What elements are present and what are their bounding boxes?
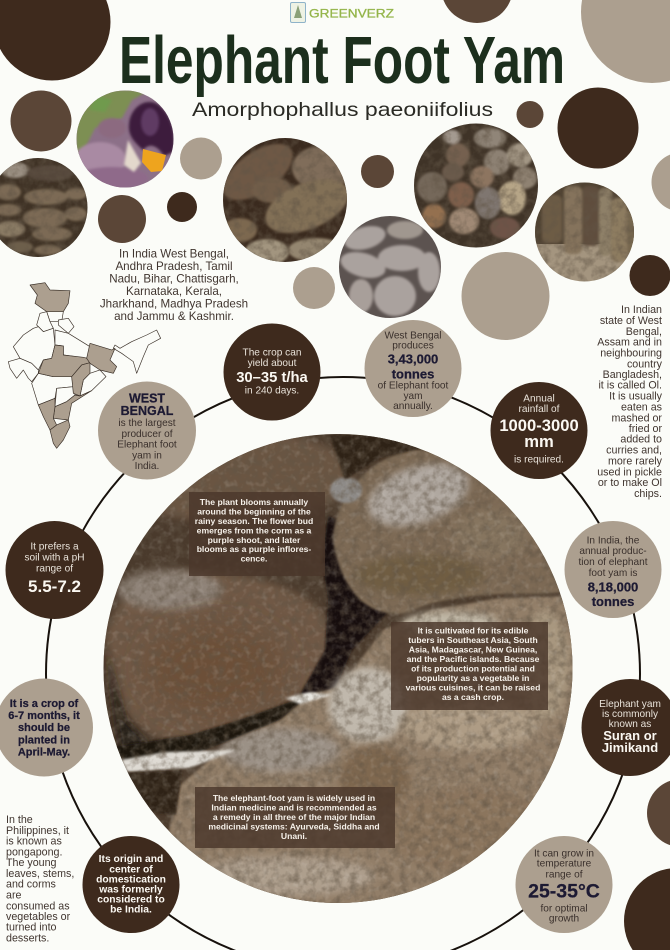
text: Ol in West Bengal and Bangladesh: more rarely bbox=[608, 455, 663, 467]
node: largest producer: producer of bbox=[121, 429, 173, 440]
node: largest producer: is the largest bbox=[118, 418, 176, 429]
node: temperature bbox=[516, 836, 612, 933]
node: common names: Suran or bbox=[603, 728, 657, 743]
panel: medicine: The elephant-foot yam is widely used in bbox=[213, 793, 375, 803]
panel: medicine bbox=[195, 787, 395, 848]
node: common names: Jimikand bbox=[602, 740, 658, 755]
panel: medicine: Indian medicine and is recommended as bbox=[211, 802, 377, 812]
map of India bbox=[8, 283, 161, 448]
node: temperature: It can grow in bbox=[534, 848, 594, 859]
node: crop duration: 6-7 months, it bbox=[8, 710, 80, 722]
node: soil pH: 5.5-7.2 bbox=[28, 577, 81, 596]
panel: cultivation bbox=[391, 622, 548, 710]
node: soil pH: range of bbox=[36, 563, 73, 574]
node: largest producer: India. bbox=[135, 461, 159, 472]
node: common names: is commonly bbox=[602, 709, 659, 720]
panel: blooming: cence. bbox=[241, 554, 267, 564]
node: origin: domestication bbox=[96, 874, 166, 885]
node: origin: Its origin and bbox=[99, 854, 163, 865]
main photo: elephant foot yams bbox=[95, 429, 580, 910]
panel: blooming: around the beginning of the bbox=[197, 506, 311, 516]
panel: cultivation: Asia, Madagascar, New Guinea, bbox=[409, 644, 537, 654]
node: crop duration: It is a crop of bbox=[10, 698, 79, 710]
node: temperature: 25-35°C bbox=[528, 880, 600, 902]
node: crop duration: April-May. bbox=[18, 746, 70, 758]
node: rainfall: is required. bbox=[514, 454, 564, 466]
text: Ol in West Bengal and Bangladesh: eaten as bbox=[621, 402, 662, 414]
text: Philippines: pongapong. bbox=[6, 846, 62, 858]
node: crop yield: yield about bbox=[248, 358, 297, 369]
node: annual production: 8,18,000 bbox=[588, 579, 638, 594]
photo: yam tubers bbox=[223, 138, 347, 262]
text: growing states: Karnataka, Kerala, bbox=[126, 285, 222, 298]
node: West Bengal production: tonnes bbox=[392, 366, 434, 382]
panel: blooming: The plant blooms annually bbox=[200, 497, 308, 507]
text: Philippines: The young bbox=[6, 857, 57, 869]
text: Philippines bbox=[6, 814, 74, 945]
text: Ol in West Bengal and Bangladesh: fried or bbox=[629, 423, 662, 435]
text: Ol in West Bengal and Bangladesh bbox=[597, 304, 663, 500]
logo: Greenverz: GREENVERZ bbox=[309, 6, 394, 20]
node: largest producer: WEST bbox=[129, 392, 165, 406]
node: West Bengal production: produces bbox=[392, 340, 434, 352]
text: growing states: In India West Bengal, bbox=[119, 248, 229, 260]
node: origin bbox=[82, 836, 180, 933]
node: origin: be India. bbox=[110, 905, 152, 916]
node: temperature: range of bbox=[545, 869, 583, 880]
text: growing states: Nadu, Bihar, Chattisgarh, bbox=[109, 272, 239, 286]
photo: stacked yams bbox=[0, 158, 88, 258]
text: Ol in West Bengal and Bangladesh: It is usually bbox=[609, 391, 663, 403]
photo: gray yams bbox=[338, 216, 441, 318]
text: Ol in West Bengal and Bangladesh: country bbox=[627, 358, 663, 370]
panel: medicine: Unani. bbox=[281, 831, 307, 841]
node: annual production: In India, the bbox=[587, 536, 640, 546]
text: Ol in West Bengal and Bangladesh: used in pickle bbox=[597, 466, 662, 478]
node: annual production: annual produc- bbox=[579, 546, 647, 557]
node: temperature: temperature bbox=[537, 859, 592, 870]
node: origin: center of bbox=[109, 864, 153, 875]
node: crop duration: planted in bbox=[18, 734, 70, 746]
panel: cultivation: of its production potential and bbox=[411, 664, 535, 674]
text: Ol in West Bengal and Bangladesh: it is called Ol. bbox=[598, 380, 662, 392]
node: common names: known as bbox=[609, 719, 651, 730]
panel: blooming bbox=[189, 492, 325, 576]
text: Ol in West Bengal and Bangladesh: state of West bbox=[600, 315, 662, 327]
logo: Greenverz bbox=[290, 2, 394, 22]
text: Philippines: vegetables or bbox=[6, 911, 71, 923]
node: rainfall: 1000-3000 bbox=[499, 416, 579, 435]
text: Philippines: leaves, stems, bbox=[6, 868, 74, 880]
panel: medicine: a remedy in all three of the major Indian bbox=[213, 812, 375, 822]
panel: cultivation: popularity as a vegetable in bbox=[417, 673, 529, 683]
text: Ol in West Bengal and Bangladesh: In Indian bbox=[621, 304, 662, 316]
node: West Bengal production: 3,43,000 bbox=[388, 352, 438, 366]
node: annual production: tion of elephant bbox=[578, 557, 648, 568]
node: crop duration: should be bbox=[18, 722, 70, 734]
node: soil pH bbox=[6, 521, 104, 619]
text: Ol in West Bengal and Bangladesh: chips. bbox=[634, 488, 662, 500]
photo: flower bbox=[74, 90, 174, 189]
node: soil pH: It prefers a bbox=[30, 542, 79, 553]
node: origin: was formerly bbox=[98, 884, 163, 895]
node: crop yield: The crop can bbox=[243, 348, 301, 358]
panel: cultivation: It is cultivated for its edible bbox=[418, 626, 529, 636]
text: Ol in West Bengal and Bangladesh: Bangladesh, bbox=[603, 369, 662, 381]
node: largest producer: BENGAL bbox=[121, 404, 174, 418]
node: West Bengal production: of Elephant foot bbox=[378, 380, 449, 392]
text: Ol in West Bengal and Bangladesh: mashed or bbox=[612, 412, 662, 424]
text: Ol in West Bengal and Bangladesh: curries and, bbox=[606, 445, 662, 457]
node: annual production: tonnes bbox=[592, 594, 634, 609]
text: Philippines: Philippines, it bbox=[6, 825, 69, 837]
node: West Bengal production: West Bengal bbox=[384, 330, 442, 342]
node: crop duration bbox=[0, 678, 93, 776]
node: largest producer: Elephant foot bbox=[117, 440, 177, 450]
text: growing states: Andhra Pradesh, Tamil bbox=[115, 260, 233, 273]
panel: medicine: medicinal systems: Ayurveda, Siddha and bbox=[208, 822, 380, 832]
node: common names bbox=[582, 679, 670, 776]
text: Philippines: desserts. bbox=[6, 933, 49, 945]
text: Ol in West Bengal and Bangladesh: Bengal, bbox=[626, 326, 662, 338]
panel: cultivation: as a cash crop. bbox=[442, 692, 504, 702]
node: largest producer: yam in bbox=[132, 450, 162, 462]
node: West Bengal production bbox=[364, 320, 462, 417]
photo: taro corms bbox=[414, 123, 538, 248]
node: rainfall: Annual bbox=[523, 394, 555, 404]
text: growing states: Jharkhand, Madhya Pradesh bbox=[100, 298, 248, 310]
panel: blooming: blooms as a purple inflores- bbox=[197, 544, 311, 554]
node: rainfall bbox=[490, 382, 588, 479]
text: Ol in West Bengal and Bangladesh: neighbouring bbox=[600, 347, 662, 359]
node: origin: considered to bbox=[97, 895, 165, 906]
node: largest producer bbox=[98, 382, 196, 480]
node: crop yield: 30–35 t/ha bbox=[236, 370, 309, 386]
text: Ol in West Bengal and Bangladesh: or to make Ol bbox=[598, 477, 662, 489]
text: Ol in West Bengal and Bangladesh: added to bbox=[620, 434, 662, 446]
text: Philippines: turned into bbox=[6, 922, 57, 934]
node: rainfall: rainfall of bbox=[519, 404, 560, 415]
node: temperature: for optimal bbox=[540, 903, 588, 914]
panel: cultivation: various cuisines, it can be raised bbox=[406, 682, 540, 692]
text: Philippines: consumed as bbox=[6, 900, 70, 912]
node: West Bengal production: annually. bbox=[393, 401, 433, 412]
panel: blooming: purple shoot, and later bbox=[208, 535, 301, 545]
photo: long tubers bbox=[535, 182, 635, 282]
connecting ring bbox=[46, 377, 640, 950]
node: common names: Elephant yam bbox=[599, 699, 661, 710]
text: growing states: and Jammu & Kashmir. bbox=[114, 310, 234, 323]
text: Philippines: is known as bbox=[6, 836, 62, 848]
node: temperature: growth bbox=[549, 914, 579, 925]
text: Philippines: are bbox=[6, 890, 22, 902]
panel: blooming: emerges from the corm as a bbox=[197, 525, 312, 535]
node: rainfall: mm bbox=[524, 432, 554, 451]
node: crop yield: in 240 days. bbox=[245, 386, 299, 396]
text: Philippines: In the bbox=[6, 814, 33, 826]
subtitle: scientific name: Amorphophallus paeoniifolius bbox=[192, 99, 493, 121]
panel: cultivation: tubers in Southeast Asia, South bbox=[408, 635, 538, 645]
node: crop yield bbox=[224, 324, 320, 420]
text: Ol in West Bengal and Bangladesh: Assam and in bbox=[597, 337, 662, 349]
node: annual production bbox=[564, 521, 662, 618]
node: soil pH: soil with a pH bbox=[24, 553, 85, 564]
panel: cultivation: and the Pacific islands. Because bbox=[407, 654, 540, 664]
text: Philippines: and corms bbox=[6, 879, 56, 891]
node: annual production: foot yam is bbox=[589, 568, 637, 579]
panel: blooming: rainy season. The flower bud bbox=[195, 516, 313, 526]
text: growing states bbox=[100, 248, 248, 323]
node: West Bengal production: yam bbox=[403, 391, 423, 402]
